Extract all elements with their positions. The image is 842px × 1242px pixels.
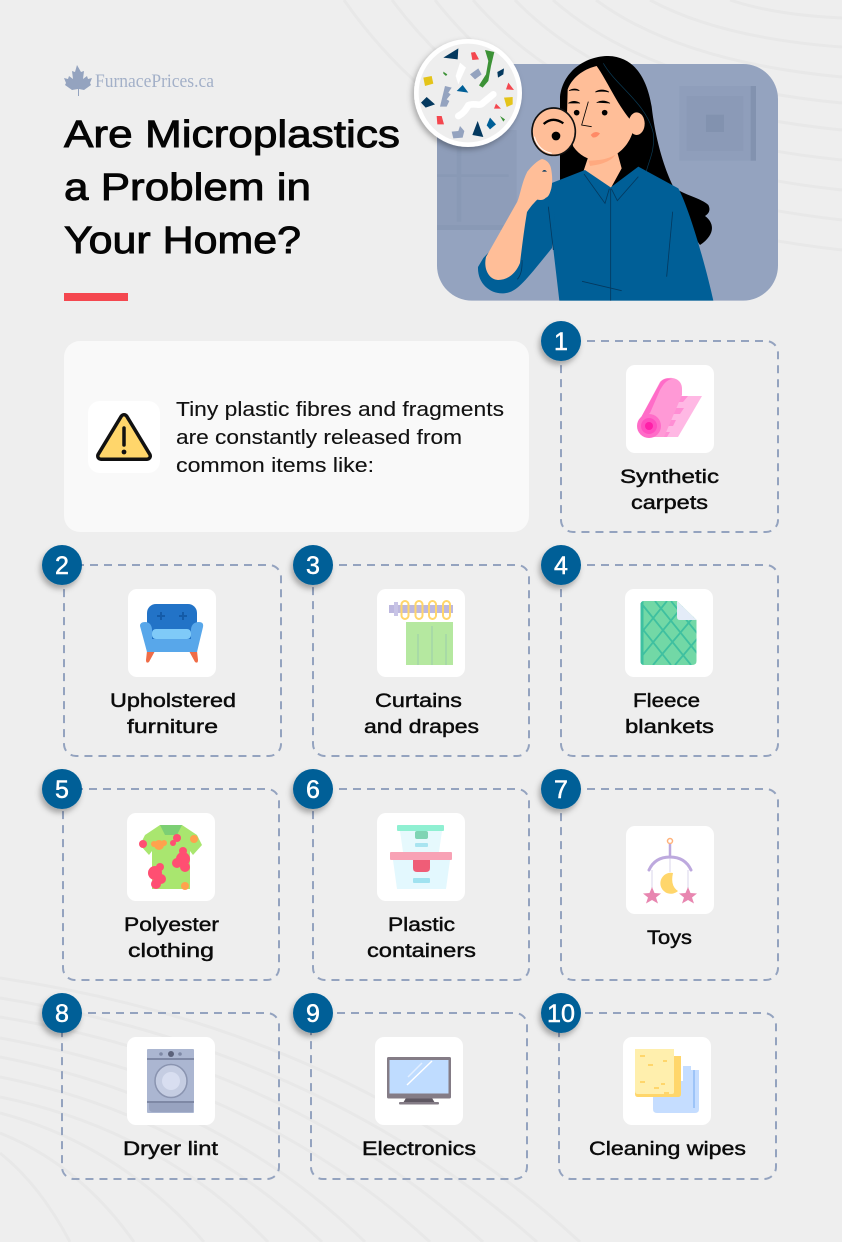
icon: dryer bbox=[127, 1037, 215, 1125]
card 6: plastic containers bbox=[313, 789, 529, 980]
card 1: synthetic carpets bbox=[561, 341, 778, 532]
icon: armchair bbox=[128, 589, 216, 677]
label bbox=[124, 914, 220, 962]
intro text: common items like: bbox=[176, 455, 374, 477]
fingertip detail bbox=[542, 170, 547, 172]
illustration background panel bbox=[437, 64, 778, 301]
arm and hand bbox=[485, 159, 552, 280]
icon: baby mobile bbox=[626, 826, 714, 914]
badge 5 bbox=[42, 769, 82, 809]
label: Curtains bbox=[375, 690, 462, 712]
badge 6: 6 bbox=[306, 776, 320, 804]
icon: blanket bbox=[625, 589, 713, 677]
card 4: fleece blankets bbox=[561, 565, 778, 756]
icon tile: warning bbox=[88, 401, 160, 473]
card 10: cleaning wipes bbox=[559, 1013, 776, 1179]
label: Fleece bbox=[633, 690, 700, 712]
card 8: dryer lint bbox=[62, 1013, 279, 1179]
label: carpets bbox=[631, 492, 708, 514]
label: Dryer lint bbox=[123, 1138, 219, 1160]
label bbox=[367, 914, 476, 962]
icon: curtain bbox=[377, 589, 465, 677]
badge 9: 9 bbox=[306, 1000, 320, 1028]
badge 9 bbox=[293, 993, 333, 1033]
neck bbox=[583, 150, 622, 188]
badge 2 bbox=[42, 545, 82, 585]
card 2: upholstered furniture bbox=[64, 565, 281, 756]
label: Upholstered bbox=[110, 690, 236, 712]
card 5: polyester clothing bbox=[63, 789, 279, 980]
illustration: woman with magnifying glass bbox=[416, 41, 778, 301]
badge 10: 10 bbox=[547, 1000, 575, 1028]
intro text: Tiny plastic fibres and fragments bbox=[176, 399, 504, 421]
badge 7: 7 bbox=[554, 776, 568, 804]
icon: shirt bbox=[127, 813, 215, 901]
label: Polyester bbox=[124, 914, 220, 936]
hair highlight bbox=[603, 63, 654, 177]
title: Are Microplastics bbox=[64, 114, 400, 156]
icon: containers bbox=[377, 813, 465, 901]
card 3: curtains and drapes bbox=[313, 565, 529, 756]
badge 4 bbox=[541, 545, 581, 585]
badge 6 bbox=[293, 769, 333, 809]
ear bbox=[629, 112, 645, 135]
badge 7 bbox=[541, 769, 581, 809]
intro text bbox=[176, 399, 504, 477]
badge 4: 4 bbox=[554, 552, 568, 580]
label bbox=[625, 690, 714, 738]
face bbox=[567, 66, 633, 160]
title: a Problem in bbox=[64, 167, 311, 209]
hair bbox=[560, 56, 712, 245]
badge 10 bbox=[541, 993, 581, 1033]
label: clothing bbox=[128, 940, 214, 962]
badge 5: 5 bbox=[55, 776, 69, 804]
badge 1: 1 bbox=[554, 328, 568, 356]
label: Synthetic bbox=[620, 466, 719, 488]
title bbox=[64, 114, 400, 262]
logo: FurnacePrices.ca bbox=[64, 65, 215, 96]
sleeve bbox=[478, 187, 557, 293]
label bbox=[110, 690, 236, 738]
panel: intro callout bbox=[64, 341, 529, 532]
icon: carpet roll bbox=[626, 365, 714, 453]
magnifying glass lens bbox=[532, 108, 575, 155]
label: Cleaning wipes bbox=[589, 1138, 746, 1160]
card 9: electronics bbox=[311, 1013, 527, 1179]
icon: wipes bbox=[623, 1037, 711, 1125]
shirt seams bbox=[517, 174, 673, 301]
neck shadow bbox=[588, 152, 617, 166]
label: Toys bbox=[647, 927, 692, 949]
badge 8: 8 bbox=[55, 1000, 69, 1028]
intro text: are constantly released from bbox=[176, 427, 462, 449]
badge 3 bbox=[293, 545, 333, 585]
logo text: FurnacePrices.ca bbox=[95, 71, 215, 92]
label: Electronics bbox=[362, 1138, 476, 1160]
label bbox=[620, 466, 719, 514]
label: blankets bbox=[625, 716, 714, 738]
label bbox=[364, 690, 479, 738]
shirt bbox=[547, 167, 713, 301]
badge 2: 2 bbox=[55, 552, 69, 580]
label: containers bbox=[367, 940, 476, 962]
card 7: toys bbox=[561, 789, 778, 980]
label: furniture bbox=[127, 716, 218, 738]
red accent bar bbox=[64, 293, 128, 301]
icon: monitor bbox=[375, 1037, 463, 1125]
microplastics circle bbox=[416, 41, 520, 145]
label: Plastic bbox=[388, 914, 455, 936]
badge 1 bbox=[541, 321, 581, 361]
badge 8 bbox=[42, 993, 82, 1033]
label: and drapes bbox=[364, 716, 479, 738]
icon: maple leaf bbox=[64, 65, 92, 96]
room window and wall frame bbox=[437, 86, 756, 230]
facial features bbox=[568, 89, 610, 137]
title: Your Home? bbox=[64, 220, 301, 262]
badge 3: 3 bbox=[306, 552, 320, 580]
